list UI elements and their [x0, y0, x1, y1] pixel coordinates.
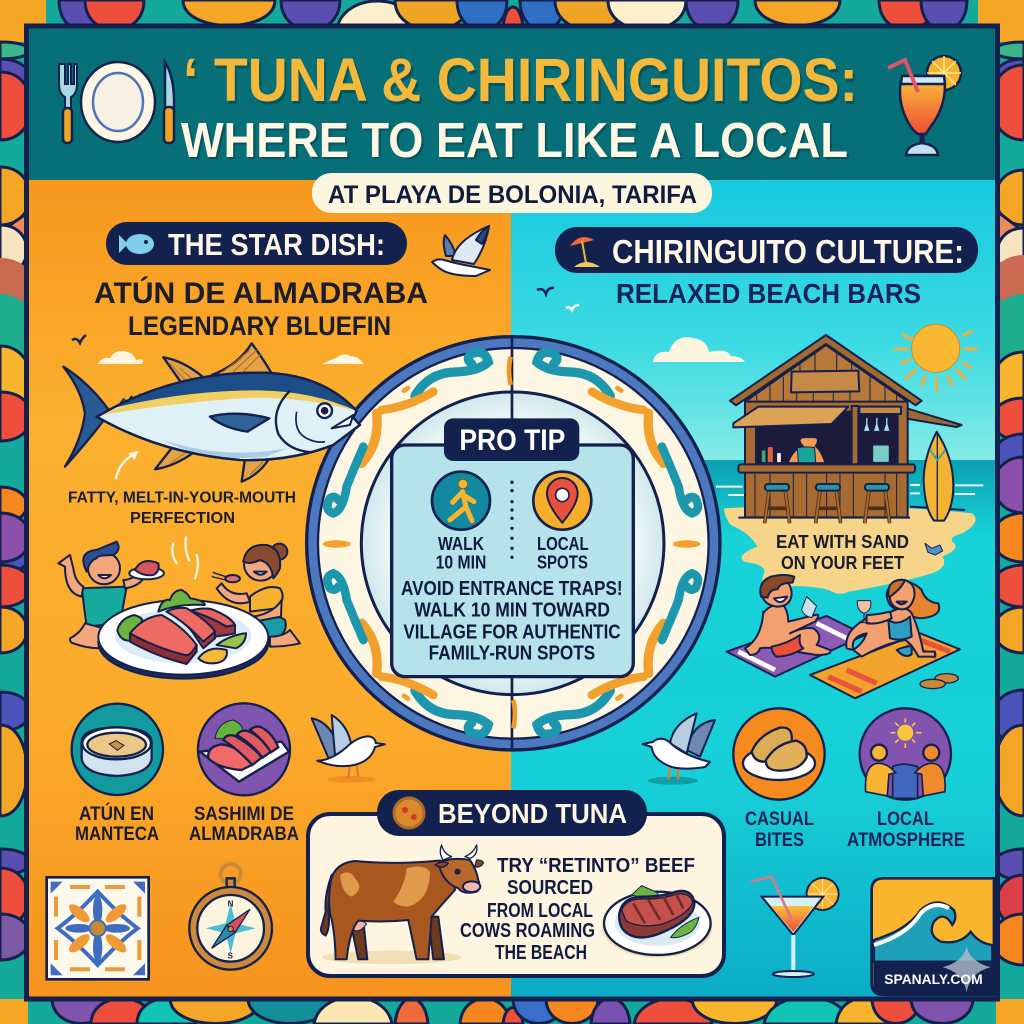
label: sashimi de almadraba: ALMADRABA: [189, 823, 299, 845]
icon: map pin: [533, 472, 591, 530]
background: cyan sky right half: [511, 178, 998, 462]
local spots label: [537, 533, 589, 572]
boy: [58, 542, 164, 648]
heading: Atún de Almadraba: ATÚN DE ALMADRABA: [94, 276, 428, 310]
bar counter: [738, 464, 915, 473]
icon: fish: [119, 234, 154, 254]
bar window: [756, 412, 852, 464]
retinto beef text: COWS ROAMING: [460, 920, 595, 942]
striped towel: [810, 633, 960, 698]
local spots label: SPOTS: [537, 551, 588, 572]
title line 2: WHERE TO EAT LIKE A LOCAL: [181, 114, 848, 168]
food icon: sashimi: [198, 703, 290, 795]
bartender: [788, 438, 825, 463]
man: [745, 575, 831, 657]
label: casual bites: BITES: [755, 829, 804, 851]
bottles: [761, 447, 781, 463]
fatty caption: PERFECTION: [130, 510, 235, 527]
panel: pro tip card: [392, 418, 633, 677]
label: atún en manteca: [75, 801, 159, 845]
fatty caption: [68, 490, 296, 527]
illustration: beach chiringuito hut: [716, 324, 983, 594]
illustration: retinto cow: [321, 845, 483, 964]
illustration: compass: [189, 864, 272, 970]
tip body text: FAMILY-RUN SPOTS: [429, 641, 595, 664]
retinto beef text: SOURCED: [507, 877, 593, 899]
caption: eat with sand: ON YOUR FEET: [781, 552, 905, 573]
tip body text: WALK 10 MIN TOWARD: [414, 599, 610, 622]
icon: standing seagull left: [312, 715, 385, 783]
label: casual bites: [745, 808, 814, 851]
pro tip label: PRO TIP: [459, 424, 565, 457]
flip flops: [920, 674, 958, 689]
label: local atmosphere: ATMOSPHERE: [847, 829, 965, 851]
label: local atmosphere: LOCAL: [877, 808, 934, 830]
roof: [730, 335, 922, 405]
beyond tuna label: BEYOND TUNA: [438, 798, 627, 829]
panel: chiringuito culture heading: CHIRINGUITO CULTURE:: [612, 233, 964, 270]
walk label: WALK: [438, 533, 485, 554]
hanging glasses and pot: [863, 417, 890, 462]
hut walls: [745, 397, 908, 517]
illustration: couple on beach towels: [727, 575, 960, 698]
icon: standing seagull right: [643, 713, 715, 785]
tip body text: [401, 577, 623, 664]
sign board: [791, 371, 859, 392]
illustration: compass: S: [228, 951, 234, 960]
plate ornament quadrants: [327, 352, 698, 734]
illustration: bluefin tuna: [63, 343, 360, 482]
clouds: [98, 337, 745, 364]
icon: flying seagull: [432, 226, 490, 276]
retinto beef text: THE BEACH: [495, 942, 587, 964]
right strip shapes: [990, 42, 1024, 965]
subheading: relaxed beach bars: RELAXED BEACH BARS: [616, 278, 921, 309]
icon: walking person: [432, 472, 490, 530]
sun: [895, 324, 977, 390]
label: sashimi de almadraba: [189, 803, 299, 845]
awning: [733, 407, 848, 427]
illustration: grilled steak: [602, 886, 712, 958]
tip body text: VILLAGE FOR AUTHENTIC: [403, 620, 621, 643]
illustration: family eating tuna: [58, 537, 300, 679]
tuna platter: [98, 590, 268, 679]
top strip shapes: [59, 0, 967, 30]
icon: fork, plate and knife: [59, 62, 174, 143]
food icon: casual bites: [733, 708, 825, 800]
local spots label: LOCAL: [537, 533, 589, 554]
icon: paella: [394, 798, 424, 828]
icon: tropical cocktail: [888, 56, 961, 155]
retinto beef text: [460, 855, 695, 964]
central plate: [307, 336, 720, 751]
label: sashimi de almadraba: SASHIMI DE: [194, 803, 294, 825]
label: atún en manteca: ATÚN EN: [79, 801, 154, 825]
food icon: local atmosphere: [860, 708, 951, 800]
sand island: [724, 507, 976, 594]
label: local atmosphere: [847, 808, 965, 851]
subtitle pill: [312, 173, 712, 213]
subheading: legendary bluefin: LEGENDARY BLUEFIN: [128, 311, 391, 341]
steam: [172, 537, 198, 578]
label: casual bites: CASUAL: [745, 808, 814, 830]
beyond tuna label: [377, 790, 647, 836]
pro tip label: [444, 418, 579, 461]
retinto beef text: TRY “RETINTO” BEEF: [497, 855, 695, 877]
walk label: 10 MIN: [436, 551, 486, 572]
floor: [738, 507, 965, 518]
panel: beyond tuna: [308, 790, 724, 976]
left strip shapes: [0, 42, 34, 960]
stools: [765, 484, 790, 523]
background: orange left half: [28, 178, 512, 998]
back roof: [907, 408, 962, 427]
purple towel: [727, 616, 865, 677]
woman: [846, 580, 939, 657]
title banner: [28, 28, 998, 180]
caption: eat with sand: EAT WITH SAND: [776, 531, 909, 552]
caption: eat with sand: [776, 531, 909, 573]
background: cyan sea right half: [511, 460, 998, 998]
dotted divider: [510, 481, 514, 559]
panel: the star dish heading: [106, 222, 407, 265]
label: atún en manteca: MANTECA: [75, 823, 159, 845]
illustration: azulejo tile: [47, 877, 149, 979]
illustration: compass: N: [228, 900, 234, 909]
bottom strip shapes: [52, 997, 973, 1024]
icon: beach umbrella: [570, 237, 600, 267]
subtitle pill: AT PLAYA DE BOLONIA, TARIFA: [328, 181, 697, 209]
logo: spanaly wave badge: [872, 878, 994, 995]
small birds: [72, 288, 579, 343]
fatty caption: FATTY, MELT-IN-YOUR-MOUTH: [68, 490, 296, 506]
logo: spanaly wave badge: SPANALY.COM: [884, 971, 983, 987]
surfboard: [924, 432, 953, 521]
girl: [212, 544, 300, 647]
sea ripples: [716, 485, 983, 495]
illustration: martini cocktail: [751, 877, 839, 977]
gable: [745, 345, 908, 402]
retinto beef text: FROM LOCAL: [487, 900, 593, 922]
scraps on sand: [925, 543, 943, 555]
food icon: atún en manteca: [72, 704, 163, 795]
walk label: [436, 533, 486, 572]
title line 1: ‘ TUNA & CHIRINGUITOS:: [183, 46, 858, 114]
tip body text: AVOID ENTRANCE TRAPS!: [401, 577, 623, 600]
panel: chiringuito culture heading: [555, 227, 978, 273]
panel: the star dish heading: THE STAR DISH:: [168, 227, 385, 262]
